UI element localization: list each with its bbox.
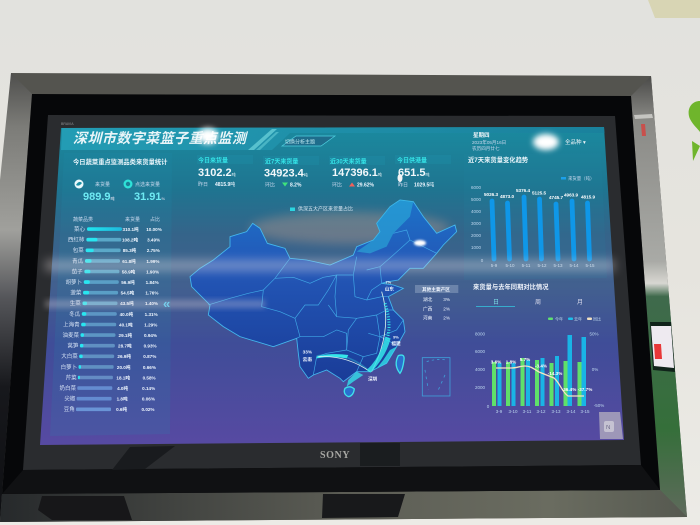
box: other producing areas: 河南	[423, 315, 433, 321]
legend: 今年	[555, 316, 563, 322]
row: 油麦菜: 29.1吨	[119, 332, 132, 338]
floating widget: N	[606, 425, 610, 431]
chart heading: 近7天来货量变化趋势	[468, 155, 529, 164]
row: 生菜	[70, 299, 158, 307]
map label: Yunnan: 33%	[303, 349, 313, 354]
row: 奶白菜: 4.0吨	[117, 385, 128, 391]
route: Yunnan to Shenzhen	[317, 354, 370, 372]
KPI card: last 30 days: 环比	[332, 182, 342, 188]
x axis: 3-10	[508, 409, 518, 414]
bar values	[484, 188, 595, 200]
box: other producing areas: 3%	[443, 297, 450, 302]
row: 西红柿: 西红柿	[68, 236, 85, 244]
row: 上海青: 1.29%	[144, 322, 157, 327]
row: 西红柿: 108.2吨	[122, 237, 138, 243]
row: 青瓜: 61.8吨	[122, 258, 136, 264]
legend: 同比	[593, 316, 601, 322]
row: 尖椒: 1.8吨	[117, 396, 128, 402]
line values: 5.7%	[520, 357, 530, 362]
x axis: 5-11	[522, 263, 531, 268]
glare: title hotspot	[198, 128, 218, 144]
row: 生菜: 生菜	[70, 299, 81, 307]
KPI card: today's supply	[395, 155, 451, 188]
y axis: 1000	[471, 245, 482, 250]
row: 豆角	[64, 405, 155, 413]
row: 西红柿: 3.49%	[147, 238, 160, 243]
island: Hainan	[344, 387, 354, 397]
row: 大白菜	[61, 352, 156, 360]
line values: -14.3%	[548, 371, 562, 376]
row: 胡萝卜	[65, 278, 159, 286]
icon: green wall logo	[689, 101, 700, 161]
brand label: SONY: SONY	[320, 450, 350, 461]
inset: South China Sea	[422, 358, 450, 396]
legend	[561, 175, 594, 182]
y axis: 5000	[471, 197, 482, 202]
row: 包菜: 85.3吨	[123, 247, 137, 253]
y axis right	[589, 332, 604, 408]
row: 芹菜: 18.1吨	[116, 374, 130, 380]
legend	[548, 316, 601, 322]
KPI card: today's incoming	[197, 155, 253, 188]
row: 莴笋	[67, 342, 157, 350]
KPI card: today's supply: 今日供港量	[397, 156, 427, 164]
icon: panel collapse chevrons: «	[163, 296, 170, 311]
row: 生菜: 43.5吨	[120, 300, 134, 306]
row: 包菜	[73, 246, 160, 254]
row: 冬瓜: 冬瓜	[69, 310, 81, 318]
y axis: 4000	[471, 209, 482, 214]
chart heading: 来货量与去年同期对比情况	[473, 282, 549, 291]
chart: year-on-year comparison	[473, 282, 604, 414]
monitor bezel	[23, 115, 641, 470]
theme switch button	[282, 136, 335, 146]
screen	[40, 127, 624, 445]
KPI card: today's incoming: 4815.9吨	[215, 181, 235, 188]
row: 芹菜: 芹菜	[66, 373, 77, 381]
row: 白萝卜: 20.0吨	[117, 364, 131, 370]
panel: today's vegetable statistics	[50, 153, 172, 436]
theme switch button: 切换分析主题	[285, 138, 315, 146]
row: 茄子	[72, 267, 159, 275]
map label: Shandong: 7%	[385, 279, 392, 284]
KPI card: last 7 days: 8.2%	[290, 182, 302, 188]
x axis: 3-9	[496, 409, 503, 414]
row: 茄子: 1.90%	[146, 269, 159, 274]
row: 奶白菜: 0.14%	[142, 386, 155, 391]
row: 奶白菜: 奶白菜	[59, 384, 76, 392]
bar values: 4745.7	[549, 195, 563, 200]
x axis: 3-11	[523, 409, 532, 414]
row: 莴笋: 莴笋	[67, 342, 79, 350]
map label: Shenzhen: 深圳	[368, 376, 378, 383]
label: key incoming volume: 点选来货量	[135, 181, 160, 188]
map label: Fujian: 9%	[393, 334, 399, 339]
row: 菠菜: 54.5吨	[121, 290, 135, 296]
row: 奶白菜	[59, 384, 155, 392]
map label: Shandong	[385, 279, 394, 293]
icon: down triangle	[282, 182, 288, 186]
row: 冬瓜: 1.31%	[145, 312, 158, 317]
y axis: 2000	[471, 233, 482, 238]
x axis	[491, 263, 595, 268]
line values: -36.4%	[562, 387, 576, 392]
row: 青瓜: 1.99%	[146, 259, 159, 264]
glare: northeast hotspot	[414, 240, 426, 246]
bar values: 4963.9	[564, 192, 578, 198]
chart background	[464, 153, 607, 280]
date block: 星期四	[473, 131, 490, 139]
variety selector: 全品种 ▾	[565, 138, 586, 146]
row: 菠菜: 菠菜	[70, 289, 82, 297]
map label: Shandong: 山东	[385, 286, 394, 293]
map of China	[190, 200, 458, 397]
row: 白萝卜: 0.66%	[143, 365, 156, 370]
KPI card: last 30 days: 29.62%	[357, 182, 375, 188]
x axis: 5-14	[569, 263, 579, 268]
row: 莴笋: 0.93%	[144, 344, 157, 349]
y axis left	[475, 332, 490, 409]
ceiling corner	[648, 0, 700, 18]
x axis: 3-14	[566, 409, 576, 414]
date block: 农历四月廿七	[472, 145, 500, 152]
row: 豆角: 豆角	[64, 405, 75, 413]
brand label: BRAVIA: BRAVIA	[61, 122, 74, 126]
row: 莴笋: 28.7吨	[118, 343, 132, 349]
legend: 去年	[574, 316, 582, 322]
KPI card: last 7 days	[263, 156, 319, 188]
y axis: 6000	[471, 185, 482, 190]
row: 菠菜	[70, 289, 158, 297]
row: 芹菜: 0.58%	[143, 375, 156, 380]
tabs	[476, 299, 583, 306]
KPI card: last 7 days: 环比	[265, 182, 275, 188]
map label: Fujian: 福建	[391, 340, 401, 347]
icon: incoming volume	[74, 180, 84, 188]
KPI card: last 30 days: 近30天来货量	[330, 158, 367, 166]
y axis right: 0%	[592, 367, 598, 372]
line values: -3.4%	[535, 364, 547, 368]
box: other producing areas: 2%	[443, 316, 450, 321]
row: 青瓜	[72, 257, 159, 265]
map label: Yunnan	[303, 349, 313, 363]
map label: Fujian	[391, 334, 401, 347]
label: incoming volume: 来货量	[95, 181, 110, 188]
line values: -37.7%	[578, 387, 592, 392]
row: 大白菜: 0.87%	[143, 354, 156, 359]
table header: 来货量	[125, 216, 140, 223]
northeast highlight	[357, 200, 413, 253]
table header: 占比	[150, 216, 160, 223]
row: 胡萝卜: 胡萝卜	[65, 278, 82, 286]
panel heading: 今日蔬菜重点监测品类来货量统计	[73, 157, 168, 166]
icon: up triangle	[349, 182, 355, 186]
row: 胡萝卜: 56.9吨	[121, 279, 135, 285]
row: 豆角: 0.02%	[141, 407, 155, 412]
row: 尖椒	[64, 395, 155, 403]
china outline	[190, 200, 457, 382]
KPI card: last 7 days: 34923.4吨	[264, 168, 308, 180]
KPI card: today's incoming: 昨日	[198, 181, 208, 188]
box: other producing areas: 广西	[423, 305, 433, 312]
bar values: 5376.4	[516, 188, 530, 193]
tabs: 日	[493, 299, 499, 306]
box: other producing areas	[415, 285, 458, 321]
y axis right: -50%	[594, 403, 604, 408]
row: 菜心: 10.00%	[146, 227, 162, 232]
row: 生菜: 1.40%	[145, 301, 158, 306]
row: 油麦菜: 0.94%	[144, 333, 157, 338]
title banner	[61, 127, 605, 150]
row: 胡萝卜: 1.84%	[146, 280, 159, 285]
x axis: 5-13	[553, 263, 563, 268]
chart: 7-day trend	[464, 153, 607, 280]
row: 白萝卜	[61, 363, 156, 371]
bars	[492, 197, 590, 259]
glare: top right hotspot	[533, 134, 559, 150]
island: Taiwan	[396, 355, 404, 373]
y axis right: 50%	[589, 332, 599, 336]
row: 大白菜: 大白菜	[61, 352, 78, 360]
KPI card: last 30 days: 147396.1吨	[332, 167, 382, 179]
row: 包菜: 包菜	[73, 246, 84, 254]
row: 菜心: 菜心	[74, 225, 85, 233]
KPI card: today's supply: 651.5吨	[398, 167, 430, 179]
x axis: 5-15	[585, 263, 595, 268]
x axis	[496, 409, 590, 414]
row: 上海青: 上海青	[63, 320, 80, 328]
row: 茄子: 茄子	[72, 267, 83, 275]
row: 大白菜: 26.9吨	[117, 353, 131, 359]
row: 茄子: 58.9吨	[122, 268, 136, 274]
legend: 来货量（吨）	[568, 175, 594, 182]
line values: 1.8%	[506, 360, 516, 364]
KPI card: today's supply: 1029.5吨	[414, 182, 434, 188]
date block: 2023年05月16日	[472, 139, 506, 146]
stat: 989.9: 989.9吨	[83, 191, 115, 203]
row: 包菜: 2.75%	[147, 248, 160, 253]
route: Shandong to Shenzhen	[372, 292, 389, 372]
bars: last year	[498, 335, 586, 406]
table header	[73, 216, 160, 223]
box: other producing areas: 2%	[443, 306, 450, 311]
row: 白萝卜: 白萝卜	[61, 363, 77, 371]
row: 芹菜	[66, 373, 156, 381]
floating widget	[599, 412, 623, 439]
row: 上海青: 40.1吨	[119, 321, 133, 327]
bars: this year	[492, 358, 582, 406]
bar values: 5026.3	[484, 192, 498, 197]
tabs: 周	[535, 299, 541, 306]
table header: 蔬菜品类	[73, 216, 93, 223]
x axis: 5-9	[491, 263, 498, 268]
cursor	[398, 174, 402, 182]
KPI card: today's incoming: 今日来货量	[198, 156, 228, 164]
bar values: 5125.5	[532, 190, 546, 196]
row: 油麦菜	[62, 331, 157, 339]
province borders	[208, 230, 437, 375]
y axis: 0	[481, 258, 484, 263]
map label: Yunnan: 云南	[303, 356, 312, 363]
stat: 31.91: 31.91%	[134, 191, 166, 203]
KPI card: last 7 days: 近7天来货量	[265, 158, 298, 166]
y axis	[471, 185, 484, 263]
y axis left: 2000	[475, 385, 486, 390]
y axis left: 8000	[475, 332, 486, 336]
row: 冬瓜: 40.0吨	[120, 311, 134, 317]
route: Fujian to Shenzhen	[367, 337, 391, 373]
x axis: 5-10	[505, 263, 515, 268]
x axis: 3-13	[551, 409, 561, 414]
line values: 3.6%	[491, 360, 501, 364]
map legend: 供深五大产区来货量占比	[298, 206, 353, 212]
row: 尖椒: 0.06%	[142, 397, 155, 402]
row: 冬瓜	[69, 310, 158, 318]
date block	[472, 131, 506, 152]
row: 油麦菜: 油麦菜	[62, 331, 79, 339]
y axis left: 0	[487, 404, 490, 409]
row: 菜心	[74, 225, 162, 233]
y axis left: 4000	[475, 367, 486, 372]
y axis: 3000	[471, 221, 482, 226]
box: other producing areas: 湖北	[423, 296, 433, 303]
x axis: 3-15	[580, 409, 590, 414]
background haze	[250, 212, 450, 244]
line: year-on-year	[496, 366, 584, 396]
glare: horizontal light band	[45, 260, 615, 308]
row: 西红柿	[68, 236, 160, 244]
y axis left: 6000	[475, 349, 486, 354]
row: 豆角: 0.6吨	[116, 406, 127, 412]
south coast glow	[347, 347, 397, 387]
row: 青瓜: 青瓜	[72, 257, 84, 265]
box: other producing areas: 其他主要产区	[422, 286, 450, 293]
row: 上海青	[63, 320, 157, 328]
row: 尖椒: 尖椒	[64, 395, 76, 403]
row: 菜心: 310.1吨	[123, 226, 139, 232]
bar values: 4815.9	[581, 194, 595, 200]
KPI card: today's incoming: 3102.2吨	[198, 167, 236, 179]
tabs: 月	[577, 299, 583, 306]
bar values: 4873.0	[500, 194, 514, 199]
KPI card: last 30 days	[329, 156, 385, 188]
icon: key incoming volume	[124, 180, 132, 188]
x axis: 5-12	[537, 263, 547, 268]
line values	[491, 357, 592, 392]
black monitor housing	[2, 94, 660, 494]
row: 菠菜: 1.76%	[145, 291, 158, 296]
title: 深圳市数字菜篮子重点监测	[73, 130, 249, 146]
x axis: 3-12	[536, 409, 546, 414]
KPI card: today's supply: 昨日	[398, 182, 408, 188]
